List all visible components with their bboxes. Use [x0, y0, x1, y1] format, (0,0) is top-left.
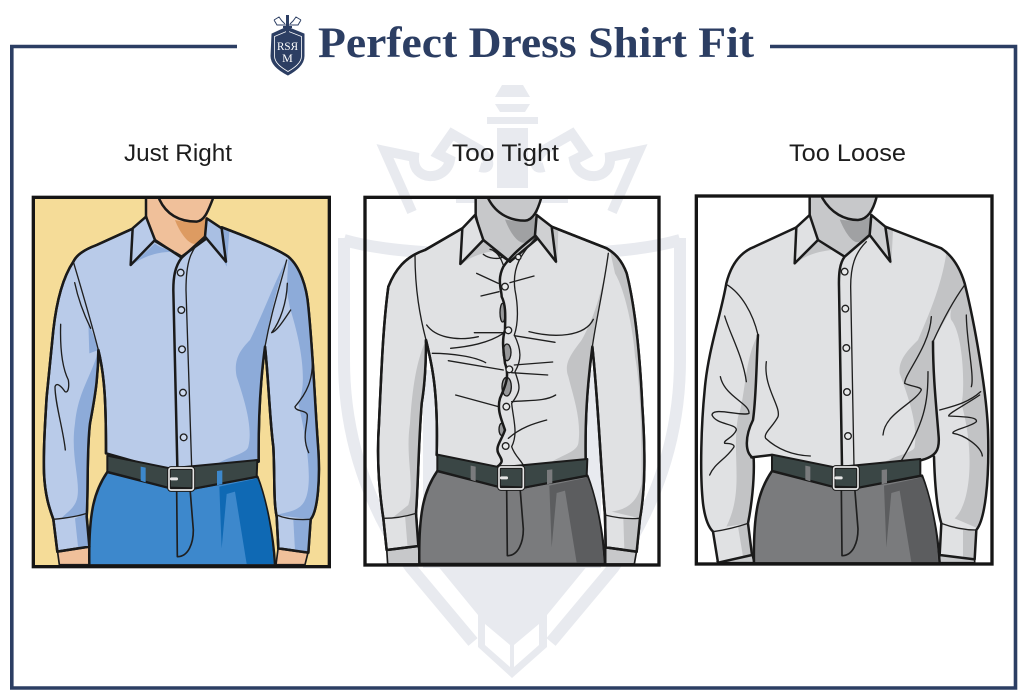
shirt	[701, 215, 988, 563]
wrinkles	[55, 283, 312, 453]
pants	[754, 471, 940, 563]
wrinkles	[710, 315, 982, 475]
hands	[387, 545, 637, 564]
belt	[437, 455, 587, 489]
buttons	[841, 268, 851, 439]
watermark: shield and crown	[344, 85, 680, 678]
hands	[57, 545, 308, 565]
wrinkles	[427, 249, 593, 438]
neck	[146, 199, 217, 258]
logo: shield crest: RSЯ	[277, 39, 298, 53]
shirt	[44, 217, 319, 553]
panel: too tight shirt	[365, 197, 659, 565]
belt	[107, 456, 257, 490]
buttons	[502, 254, 521, 449]
pants	[419, 471, 605, 564]
neck	[810, 197, 880, 257]
belt	[772, 455, 920, 489]
title: Perfect Dress Shirt Fit	[318, 20, 755, 67]
collar	[460, 215, 483, 264]
logo: shield crest: M	[282, 51, 293, 65]
panel: just right shirt	[33, 197, 329, 567]
shirt	[378, 215, 644, 552]
panel: too loose shirt	[696, 196, 992, 564]
logo: shield crest	[271, 15, 304, 75]
shirt shadows	[392, 227, 644, 552]
label: Just Right: Just Right	[124, 140, 232, 167]
neck	[476, 198, 545, 262]
placket	[155, 240, 182, 467]
wavy placket	[483, 236, 535, 468]
buttons	[177, 269, 187, 441]
placket gaps	[499, 303, 511, 435]
label: Too Tight: Too Tight	[452, 140, 559, 167]
pants	[89, 472, 275, 565]
shirt shadows	[726, 227, 988, 559]
label: Too Loose: Too Loose	[789, 140, 906, 167]
collar	[131, 217, 155, 265]
collar	[795, 215, 818, 263]
placket	[818, 235, 870, 467]
shirt shadows	[62, 228, 319, 553]
hands	[718, 554, 975, 563]
